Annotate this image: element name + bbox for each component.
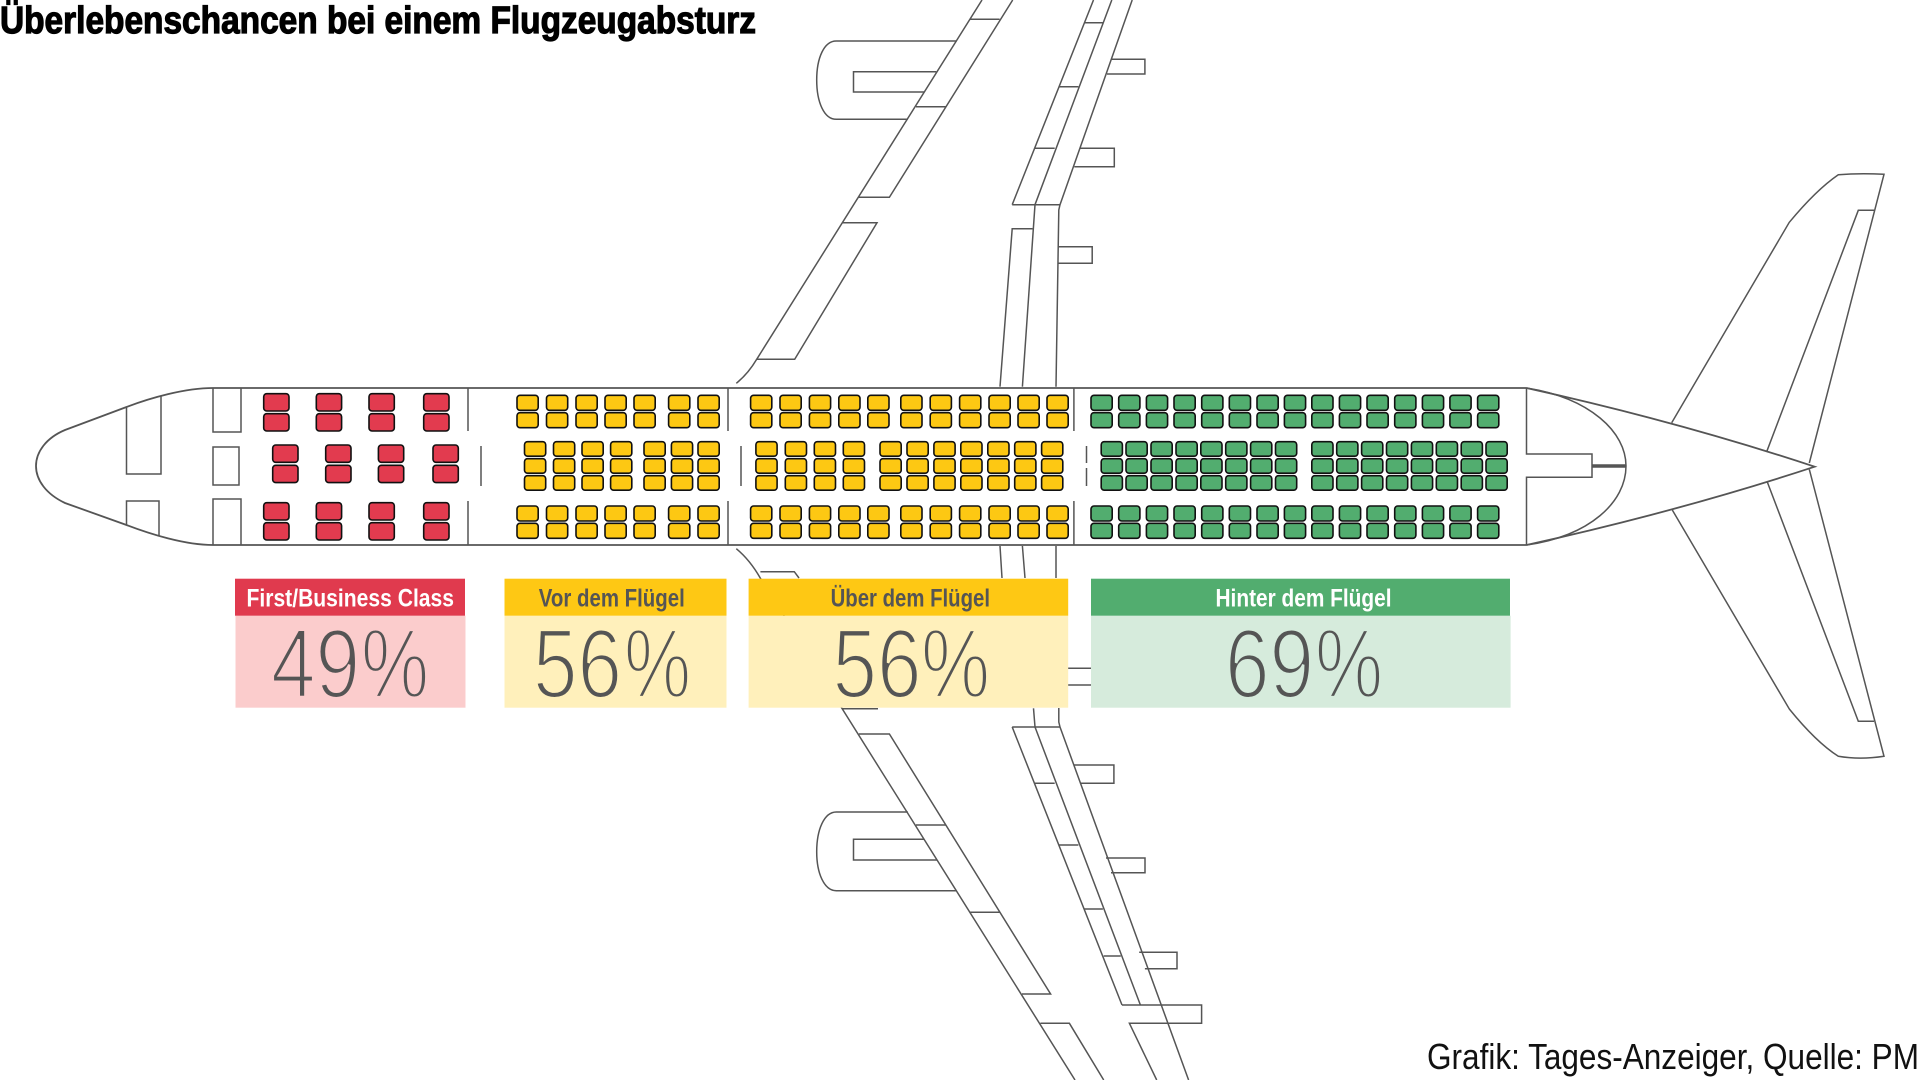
panel: First/Business Class 49%: First/Business Class [246, 584, 454, 612]
upper engine [817, 41, 957, 119]
panel: First/Business Class 49% [235, 579, 466, 718]
upper wing [736, 0, 1145, 387]
panel: Vor dem Flügel 56%: 56 [533, 608, 622, 718]
seats: over the wing [751, 395, 1068, 538]
panel: Über dem Flügel 56%: % [921, 608, 990, 718]
seats: behind the wing [1091, 395, 1507, 538]
panel: First/Business Class 49%: % [361, 608, 429, 718]
lower wing [736, 546, 1202, 1080]
panel: Hinter dem Flügel 69%: Hinter dem Flügel [1216, 584, 1392, 612]
lower tailplane [1672, 469, 1884, 758]
title: Überlebenschancen bei einem Flugzeugabsturz [0, 0, 756, 42]
panel: Vor dem Flügel 56%: Vor dem Flügel [539, 584, 685, 612]
panel: Hinter dem Flügel 69%: % [1315, 608, 1383, 718]
panel: First/Business Class 49%: 49 [271, 608, 360, 718]
panel: Vor dem Flügel 56%: % [624, 608, 691, 718]
panel: Vor dem Flügel 56% [504, 579, 726, 718]
seats: first/business class [264, 394, 458, 540]
lower engine [817, 812, 957, 891]
seats: before the wing [517, 395, 719, 538]
upper tailplane [1672, 174, 1884, 463]
fuselage [36, 388, 1815, 545]
panel: Hinter dem Flügel 69%: 69 [1225, 608, 1314, 718]
panel: Über dem Flügel 56% [749, 579, 1068, 718]
panel: Hinter dem Flügel 69% [1091, 579, 1511, 718]
panel: Über dem Flügel 56%: 56 [832, 608, 922, 718]
panel: Über dem Flügel 56%: Über dem Flügel [831, 584, 990, 612]
